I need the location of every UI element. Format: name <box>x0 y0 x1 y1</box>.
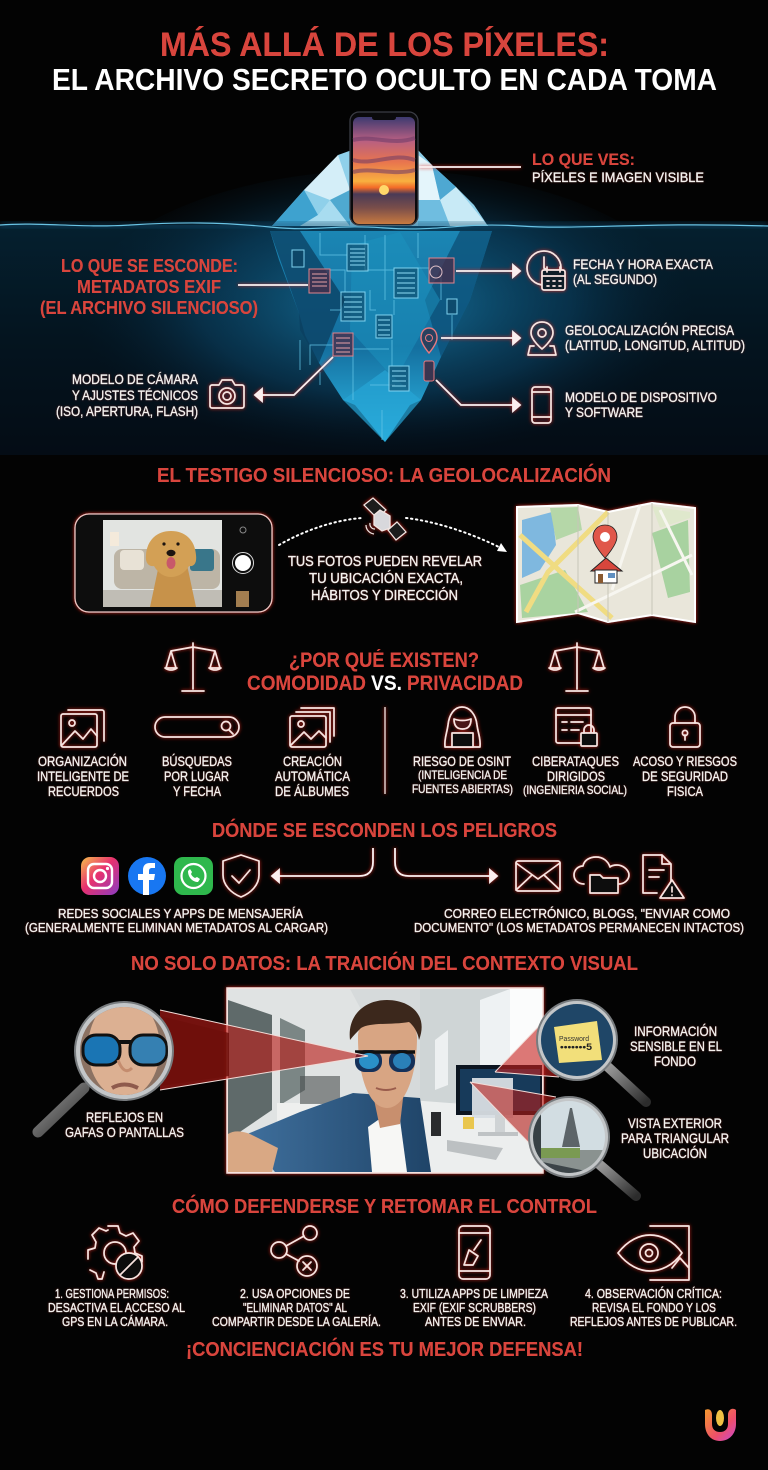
label: location <box>565 323 745 353</box>
label: device: Y SOFTWARE <box>565 405 643 420</box>
text: step 4: REVISA EL FONDO Y LOS <box>592 1301 716 1315</box>
label: camera: MODELO DE CÁMARA <box>72 372 198 387</box>
icon: gear with block sign <box>88 1226 142 1279</box>
icon: padlock <box>670 707 700 747</box>
icon: share with x <box>271 1226 317 1276</box>
icon: search bar <box>155 717 239 737</box>
magnifier: password note: Password <box>559 1036 589 1043</box>
icon: envelope <box>516 861 560 891</box>
text: albums <box>275 754 350 799</box>
heading: geolocation: EL TESTIGO SILENCIOSO: LA GEOLOCALIZACIÓN <box>157 463 611 487</box>
text: cyberattacks: (INGENIERIA SOCIAL) <box>523 783 627 797</box>
text: sensitive info: FONDO <box>654 1053 696 1069</box>
icon: phone with brush <box>459 1226 490 1279</box>
text: step 4 <box>570 1286 737 1329</box>
text: cyberattacks: CIBERATAQUES <box>532 754 619 769</box>
text: osint: (INTELIGENCIA DE <box>418 768 507 782</box>
label: what is hidden <box>40 255 258 318</box>
icon: scales right <box>549 643 605 691</box>
text: harassment: DE SEGURIDAD <box>642 769 728 784</box>
icon: camera <box>210 380 244 408</box>
text: step 2: "ELIMINAR DATOS" AL <box>243 1301 347 1315</box>
text: searches <box>162 754 232 799</box>
text: organise: INTELIGENTE DE <box>37 769 129 784</box>
text: step 1: DESACTIVA EL ACCESO AL <box>48 1301 185 1315</box>
arrow: right <box>395 848 497 882</box>
text: email: CORREO ELECTRÓNICO, BLOGS, "ENVIAR COMO <box>444 906 730 921</box>
text: organise <box>37 754 129 799</box>
cone: window <box>470 1082 556 1143</box>
text: osint <box>412 754 513 796</box>
arrow: camera <box>255 357 333 401</box>
map <box>517 503 695 622</box>
text: searches: Y FECHA <box>173 784 221 799</box>
text: step 1: 1. GESTIONA PERMISOS: <box>55 1287 169 1301</box>
title: MÁS ALLÁ DE LOS PÍXELES: <box>160 26 609 64</box>
icon: facebook <box>128 857 166 895</box>
text: step 2 <box>212 1287 381 1329</box>
text: step 2: COMPARTIR DESDE LA GALERÍA. <box>212 1314 381 1329</box>
line: what you see <box>419 166 521 168</box>
text: social networks: (GENERALMENTE ELIMINAN METADATOS AL CARGAR) <box>25 920 328 935</box>
arrow: date <box>456 265 520 277</box>
text: geolocation: TUS FOTOS PUEDEN REVELAR <box>288 553 482 570</box>
panel: dangers <box>25 848 744 935</box>
line: hidden <box>238 284 308 286</box>
panel: why they exist <box>37 643 737 799</box>
label: what you see: PÍXELES E IMAGEN VISIBLE <box>532 169 704 185</box>
panel: defence <box>48 1226 737 1329</box>
icon: cloud and folder <box>574 857 629 893</box>
label: device: MODELO DE DISPOSITIVO <box>565 390 717 405</box>
icon: document warning <box>643 855 684 898</box>
heading: why: COMODIDAD <box>247 672 366 695</box>
heading: visual context: NO SOLO DATOS: LA TRAICIÓN DEL CONTEXTO VISUAL <box>131 951 638 975</box>
label: what you see <box>532 150 704 185</box>
text: step 3: ANTES DE ENVIAR. <box>425 1315 526 1329</box>
text: albums: CREACIÓN <box>283 754 342 769</box>
text: osint: RIESGO DE OSINT <box>413 754 511 769</box>
heading: why <box>247 649 523 695</box>
text: step 1 <box>48 1287 185 1329</box>
icon: scales left <box>165 643 221 691</box>
iceberg below water: data archive <box>270 231 492 442</box>
text: outside view: UBICACIÓN <box>643 1145 707 1161</box>
text: sensitive info <box>630 1023 722 1069</box>
magnifier: password note <box>537 1000 646 1102</box>
icon: shield <box>223 855 259 897</box>
label: camera: Y AJUSTES TÉCNICOS <box>72 388 198 403</box>
text: sensitive info: SENSIBLE EN EL <box>630 1038 722 1054</box>
heading: why: ¿POR QUÉ EXISTEN? <box>289 649 479 672</box>
text: reflections: REFLEJOS EN <box>86 1109 163 1125</box>
arrow: device <box>436 380 520 411</box>
text: searches: POR LUGAR <box>164 769 229 784</box>
arrow: left <box>272 848 373 882</box>
icon: code window with lock <box>556 708 597 746</box>
text: step 4: 4. OBSERVACIÓN CRÍTICA: <box>585 1286 722 1301</box>
panel: iceberg <box>0 112 768 470</box>
text: social networks: REDES SOCIALES Y APPS DE MENSAJERÍA <box>58 906 303 921</box>
heading: defence: CÓMO DEFENDERSE Y RETOMAR EL CONTROL <box>172 1194 597 1218</box>
text: reflections: GAFAS O PANTALLAS <box>65 1124 184 1140</box>
label: camera: (ISO, APERTURA, FLASH) <box>56 404 198 419</box>
divider <box>384 707 386 794</box>
text: harassment: ACOSO Y RIESGOS <box>633 754 737 769</box>
icon: smartphone <box>532 387 551 423</box>
cone: password <box>495 1025 559 1077</box>
icon: eye and picture <box>618 1226 689 1280</box>
closing message: ¡CONCIENCIACIÓN ES TU MEJOR DEFENSA! <box>186 1337 583 1361</box>
panel: geolocation <box>75 498 695 622</box>
text: step 3 <box>400 1287 549 1329</box>
label: date: (AL SEGUNDO) <box>573 272 657 287</box>
waterline <box>0 222 768 229</box>
text: email <box>414 906 744 935</box>
title <box>52 26 717 97</box>
text: step 2: 2. USA OPCIONES DE <box>240 1287 350 1301</box>
label: location: GEOLOCALIZACIÓN PRECISA <box>565 323 734 338</box>
text: harassment: FISICA <box>667 784 703 799</box>
magnifier: password note: •••••••5 <box>560 1042 592 1052</box>
icon: photos <box>61 710 104 747</box>
text: osint: FUENTES ABIERTAS) <box>412 782 513 796</box>
text: outside view <box>621 1115 729 1161</box>
text: organise: RECUERDOS <box>48 784 119 799</box>
selfie photo <box>227 988 543 1173</box>
label: date: FECHA Y HORA EXACTA <box>573 257 713 272</box>
phone with dog photo <box>75 514 272 612</box>
label: what is hidden: LO QUE SE ESCONDE: <box>61 255 238 276</box>
text: geolocation: TU UBICACIÓN EXACTA, <box>309 570 463 587</box>
text: geolocation: HÁBITOS Y DIRECCIÓN <box>311 587 458 604</box>
icon: phone with sunset <box>350 112 418 225</box>
arrow: dotted arc <box>279 518 507 552</box>
icon: album stack <box>290 708 334 747</box>
text: outside view: VISTA EXTERIOR <box>628 1115 722 1131</box>
heading: dangers: DÓNDE SE ESCONDEN LOS PELIGROS <box>212 818 557 842</box>
magnifier: eiffel tower <box>529 1097 636 1196</box>
text: step 4: REFLEJOS ANTES DE PUBLICAR. <box>570 1315 737 1329</box>
text: cyberattacks: DIRIGIDOS <box>547 769 605 784</box>
panel: visual context <box>38 988 729 1196</box>
icon: whatsapp <box>174 857 213 895</box>
label: what is hidden: METADATOS EXIF <box>77 276 221 297</box>
text: social networks <box>25 906 328 935</box>
heading: why: PRIVACIDAD <box>407 672 523 695</box>
cone: reflection <box>160 1010 368 1090</box>
text: searches: BÚSQUEDAS <box>162 754 232 769</box>
icon: clock and calendar <box>527 251 565 290</box>
text: cyberattacks <box>523 754 627 797</box>
iceberg above water <box>272 150 488 226</box>
magnifier: sunglasses <box>38 998 173 1132</box>
text: step 3: 3. UTILIZA APPS DE LIMPIEZA <box>400 1287 549 1301</box>
label: location: (LATITUD, LONGITUD, ALTITUD) <box>565 338 745 353</box>
text: geolocation <box>288 553 482 604</box>
icon: hooded hacker <box>445 707 480 747</box>
text: organise: ORGANIZACIÓN <box>38 754 127 769</box>
text: outside view: PARA TRIANGULAR <box>621 1130 729 1146</box>
label: what you see: LO QUE VES: <box>532 150 635 169</box>
label: camera <box>56 372 198 419</box>
text: reflections <box>65 1109 184 1140</box>
text: albums: DE ÁLBUMES <box>275 784 349 799</box>
title: EL ARCHIVO SECRETO OCULTO EN CADA TOMA <box>52 62 717 97</box>
icon: location pin <box>528 322 556 355</box>
text: step 3: EXIF (EXIF SCRUBBERS) <box>413 1301 536 1315</box>
arrow: location <box>441 332 520 344</box>
label: device <box>565 390 717 420</box>
label: date <box>573 257 713 287</box>
text: step 1: GPS EN LA CÁMARA. <box>62 1314 168 1329</box>
heading: why: VS. <box>371 672 402 695</box>
text: harassment <box>633 754 737 799</box>
text: sensitive info: INFORMACIÓN <box>634 1023 717 1039</box>
text: albums: AUTOMÁTICA <box>275 769 350 784</box>
icon: satellite <box>364 498 406 540</box>
label: what is hidden: (EL ARCHIVO SILENCIOSO) <box>40 297 258 318</box>
icon: logo <box>705 1409 736 1441</box>
icon: instagram <box>81 857 119 895</box>
